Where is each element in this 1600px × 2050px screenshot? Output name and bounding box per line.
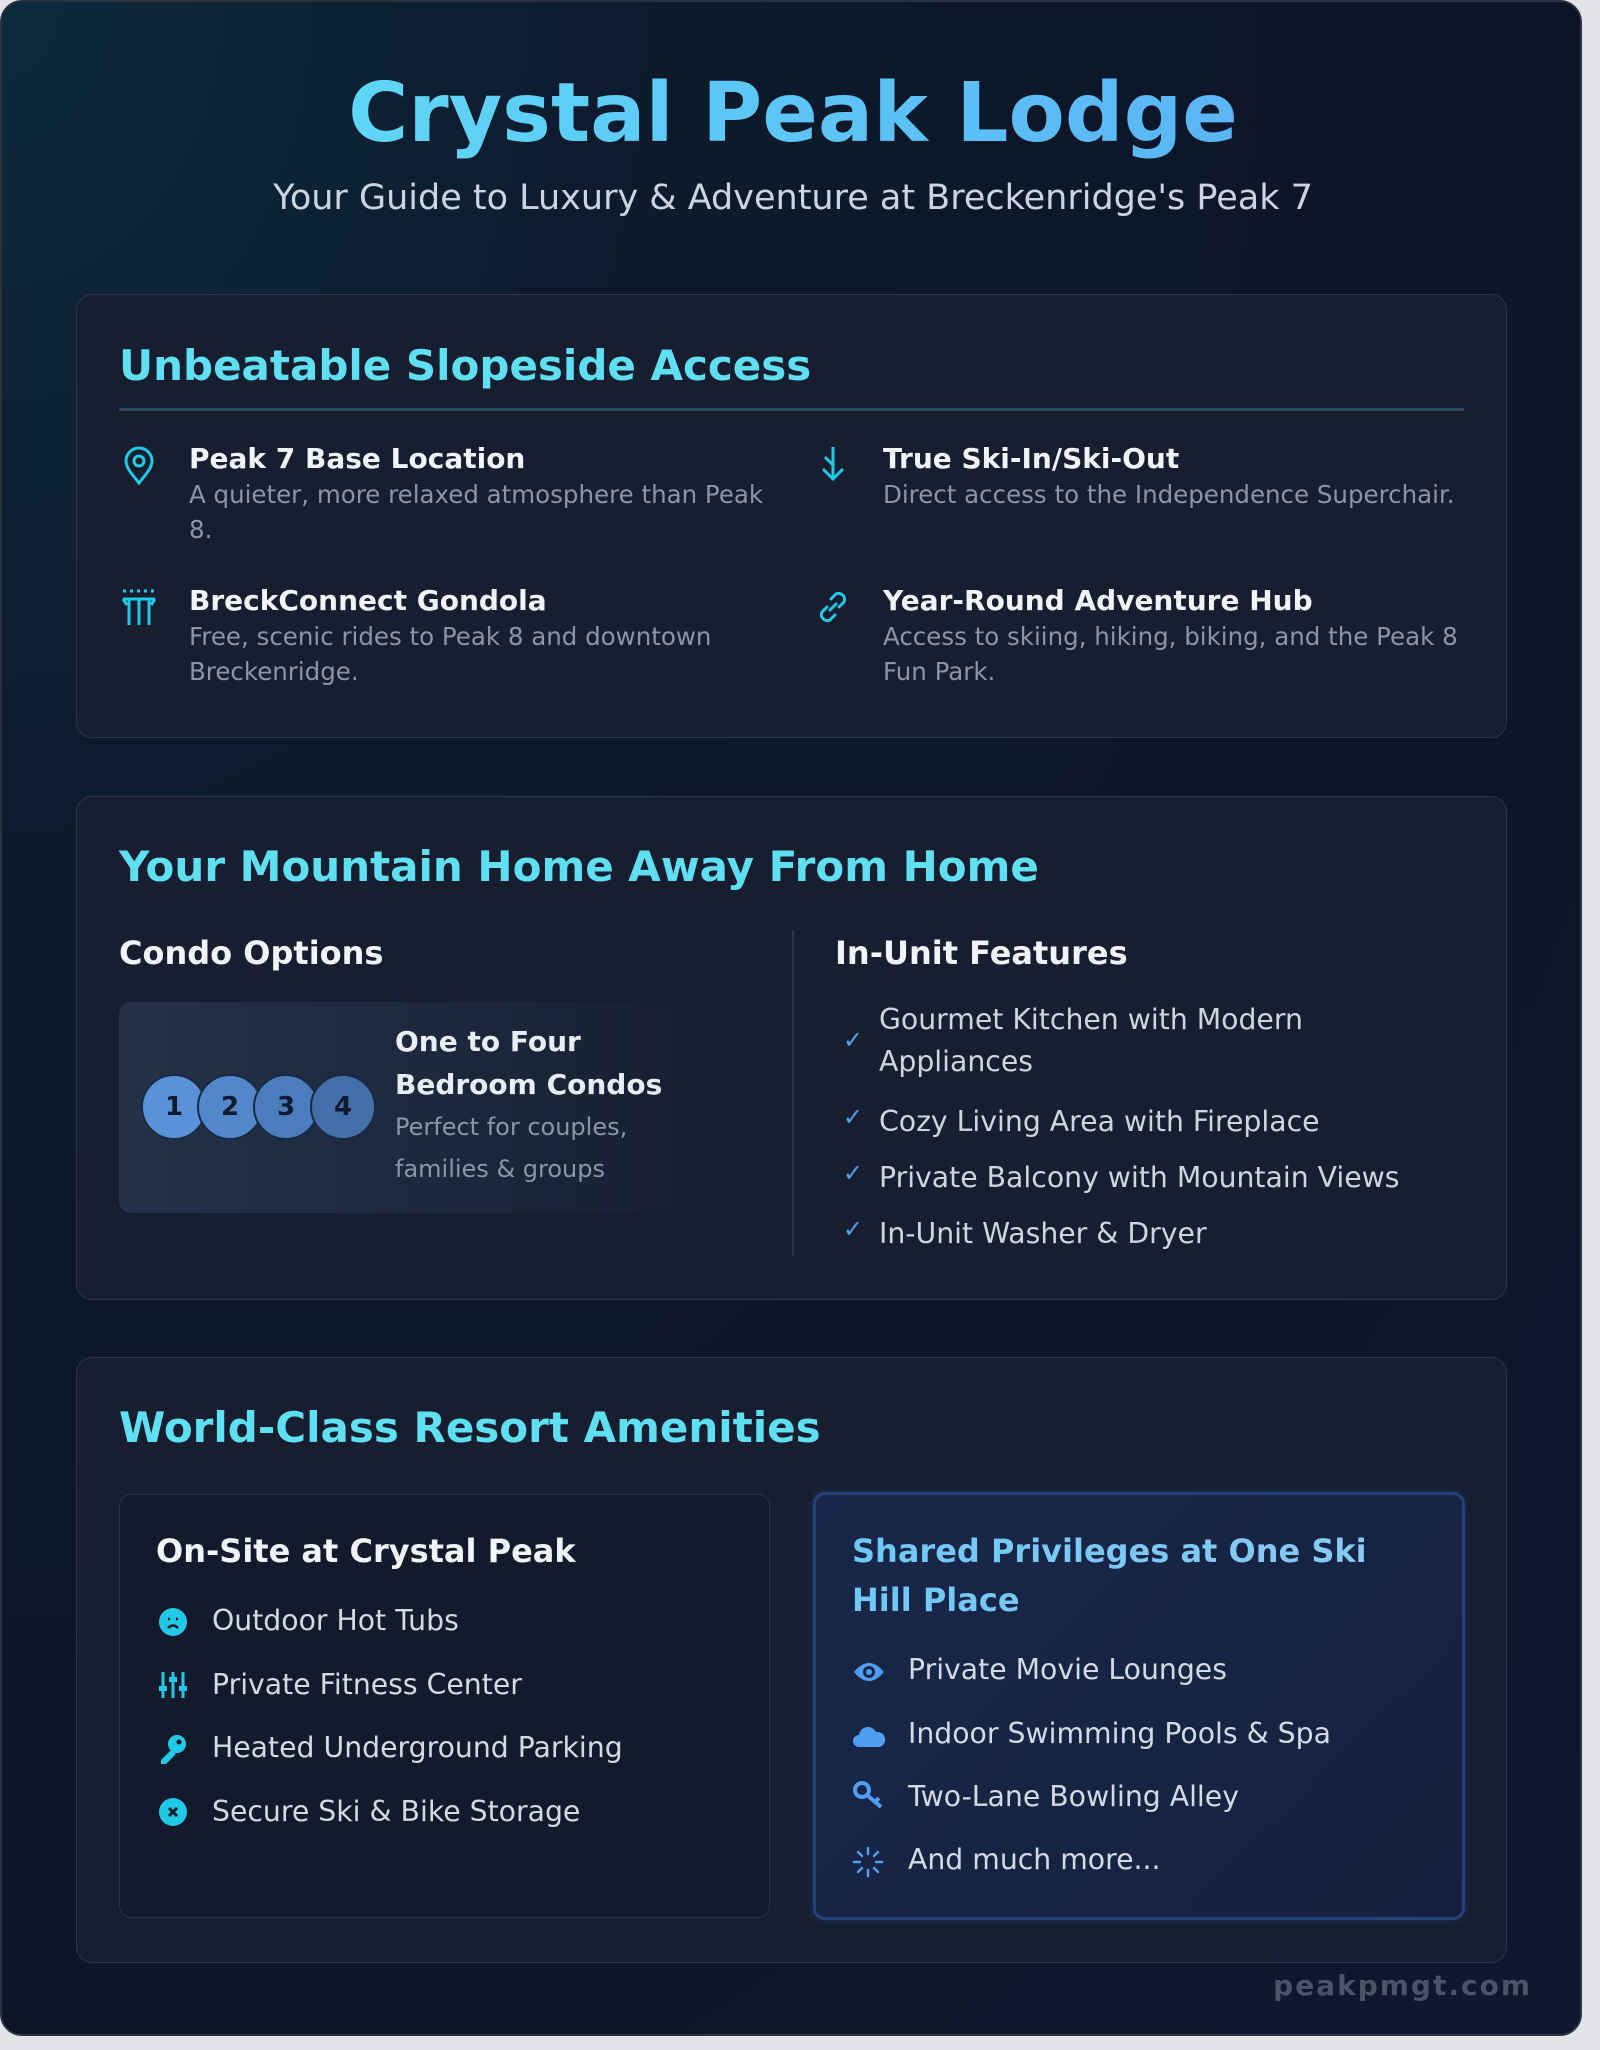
feature list — [843, 1003, 1400, 1250]
panel: mountain home — [76, 796, 1507, 1300]
condo text — [395, 1025, 662, 1183]
panel: slopeside access: Access to skiing, hiking, biking, and the Peak 8 Fun Park. — [883, 622, 1458, 686]
panel: slopeside access: BreckConnect Gondola — [189, 584, 547, 617]
subheading: in-unit features: In-Unit Features — [835, 934, 1128, 972]
icon: eye — [854, 1663, 884, 1681]
heading: Unbeatable Slopeside Access — [119, 341, 811, 390]
condo text: Perfect for couples, — [395, 1113, 627, 1141]
box: on-site: Outdoor Hot Tubs — [212, 1604, 459, 1637]
panel: slopeside access: Peak 7 Base Location — [189, 442, 525, 475]
footer: website: peakpmgt.com — [1273, 1969, 1532, 2002]
box: shared privileges: Private Movie Lounges — [908, 1653, 1227, 1686]
bedroom circles: 2 — [221, 1092, 239, 1122]
subtitle: Your Guide to Luxury & Adventure at Breckenridge's Peak 7 — [273, 178, 1313, 218]
bedroom circles: 3 — [277, 1092, 295, 1122]
icon: spinner — [852, 1846, 884, 1878]
icon: gondola — [122, 590, 156, 625]
bedroom circles: 1 — [165, 1092, 183, 1122]
condo text: families & groups — [395, 1155, 605, 1183]
heading: World-Class Resort Amenities — [119, 1403, 821, 1452]
feature list: ✓ — [843, 1159, 863, 1187]
subheading: condo options: Condo Options — [119, 934, 383, 972]
condo text: Bedroom Condos — [395, 1068, 662, 1101]
panel: slopeside access: Direct access to the Independence Superchair. — [883, 480, 1455, 509]
feature list: In-Unit Washer & Dryer — [879, 1217, 1207, 1250]
icon: fitness — [159, 1672, 187, 1698]
box: shared privileges: Indoor Swimming Pools & Spa — [908, 1717, 1331, 1750]
feature list: ✓ — [843, 1026, 863, 1054]
box: on-site: On-Site at Crystal Peak — [156, 1532, 576, 1570]
feature list: Private Balcony with Mountain Views — [879, 1161, 1400, 1194]
title — [2, 64, 1584, 164]
item: ski-in — [822, 442, 1455, 509]
panel: slopeside access: Free, scenic rides to Peak 8 and downtown Breckenridge. — [189, 622, 711, 686]
item: peak 7 — [124, 442, 763, 544]
icon: link — [820, 592, 846, 622]
condo text: One to Four — [395, 1025, 581, 1058]
feature list: Gourmet Kitchen with Modern Appliances — [879, 1003, 1303, 1078]
panel: slopeside access: True Ski-In/Ski-Out — [883, 442, 1179, 475]
box: on-site: Secure Ski & Bike Storage — [212, 1795, 580, 1828]
icon: arrow down — [822, 447, 844, 481]
item: adventure hub — [820, 584, 1458, 686]
icon: storage — [159, 1798, 187, 1826]
panel: amenities — [76, 1357, 1507, 1963]
box: shared privileges: And much more... — [908, 1843, 1161, 1876]
box: on-site — [119, 1494, 770, 1918]
feature list: ✓ — [843, 1215, 863, 1243]
bedroom circles: 4 — [334, 1092, 352, 1122]
title: Crystal Peak Lodge — [348, 66, 1238, 161]
panel: slopeside access: Year-Round Adventure Hub — [883, 584, 1313, 617]
box: on-site: Heated Underground Parking — [212, 1731, 623, 1764]
panel: slopeside access — [76, 294, 1507, 738]
item: gondola — [122, 584, 711, 686]
icon: cloud — [853, 1727, 886, 1747]
box: shared privileges: Shared Privileges at One Ski Hill Place — [852, 1532, 1367, 1619]
panel: slopeside access: A quieter, more relaxed atmosphere than Peak 8. — [189, 480, 763, 544]
icon: pin — [124, 446, 154, 486]
icon: hot tub — [159, 1608, 187, 1636]
icon: key — [161, 1735, 186, 1764]
bedroom circles — [141, 1074, 374, 1140]
box: on-site: Private Fitness Center — [212, 1668, 522, 1701]
heading: Your Mountain Home Away From Home — [119, 842, 1039, 891]
icon: bowling key — [853, 1781, 882, 1808]
feature list: ✓ — [843, 1103, 863, 1131]
box: shared privileges — [813, 1492, 1465, 1920]
condo box — [119, 1002, 745, 1213]
feature list: Cozy Living Area with Fireplace — [879, 1105, 1320, 1138]
box: shared privileges: Two-Lane Bowling Alley — [908, 1780, 1239, 1813]
